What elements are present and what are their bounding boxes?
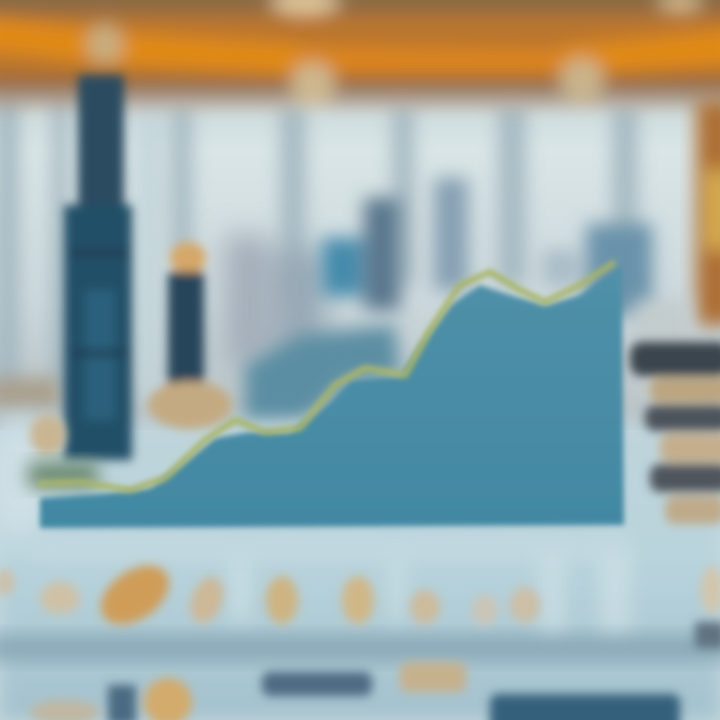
left olive chart base [28, 462, 98, 488]
distant skyline [225, 235, 325, 365]
chart: yellow-green trend line [38, 262, 615, 490]
tall dark tower [64, 75, 132, 460]
distant towers [322, 178, 652, 314]
chart: teal area [40, 265, 624, 528]
mid-ground teal block behind chart [245, 325, 400, 430]
ceiling: orange beams [0, 0, 720, 106]
row of gold bars [0, 554, 720, 636]
bottom objects [30, 622, 720, 720]
second tower with orange top [30, 242, 232, 455]
lower horizon band [0, 300, 690, 408]
window wall background [0, 0, 720, 430]
floor [0, 420, 720, 720]
stacked discs on right [630, 342, 720, 524]
orange right column [696, 100, 720, 325]
